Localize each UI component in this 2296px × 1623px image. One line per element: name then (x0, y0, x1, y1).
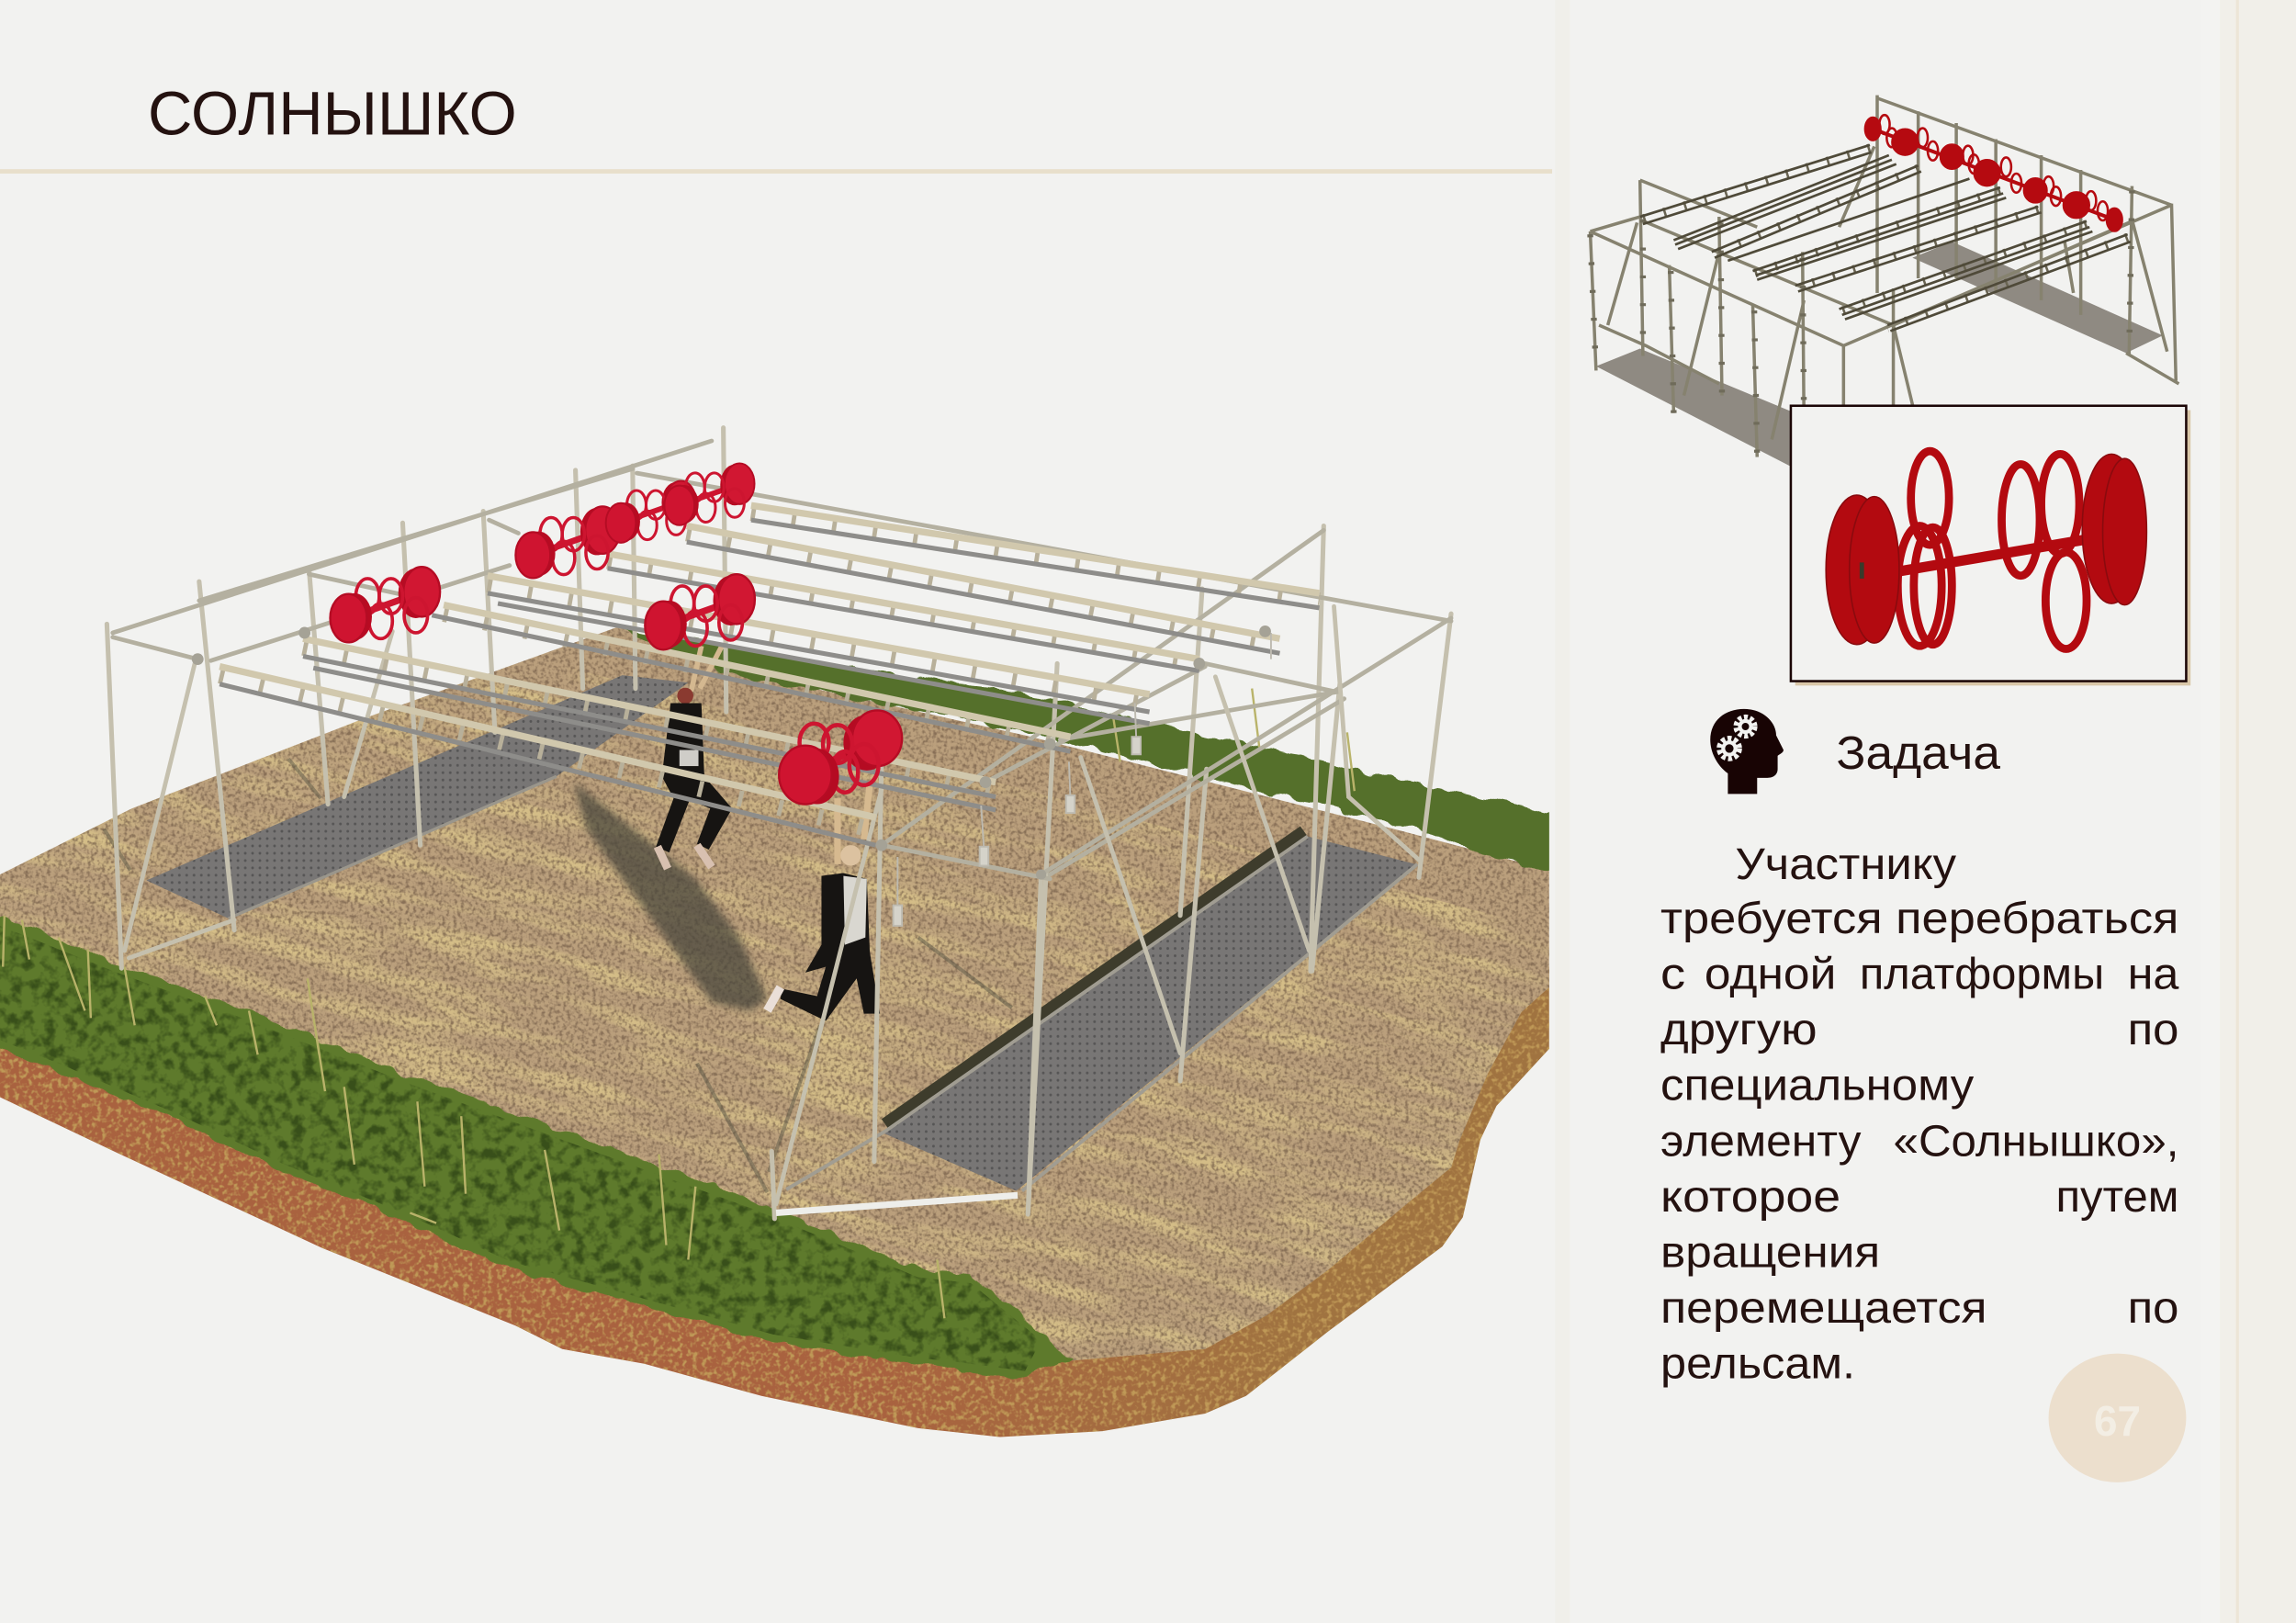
thumbnail clamps on posts (1591, 190, 2132, 457)
body text: элементу (1660, 1117, 1862, 1166)
tube clamps (192, 626, 1271, 880)
body text (1660, 840, 2179, 1389)
body text: платформы (1860, 950, 2104, 998)
body text: по (2128, 1284, 2178, 1333)
thumbnail platform right (1912, 242, 2163, 353)
grass mottling (0, 926, 1041, 1371)
side margin bands (1555, 0, 2296, 1623)
thumbnail: overall structure (1591, 96, 2178, 468)
ground: dirt surface (0, 627, 1549, 1361)
thumbnail ladders (1640, 145, 2131, 331)
reel detail drawing (1826, 451, 2146, 648)
ground: front grass strip (0, 917, 1070, 1377)
body text: с (1660, 950, 1685, 998)
body text: по (2128, 1006, 2178, 1054)
body text: рельсам. (1660, 1340, 1855, 1389)
inset box: reel detail (1791, 406, 2190, 685)
icon: head with gears (1710, 709, 1784, 794)
hanging weights (894, 633, 1271, 926)
person near (767, 783, 880, 1021)
thumbnail posts and frame (1591, 96, 2178, 457)
frame shadows on ground (104, 759, 1012, 1192)
ground: soil specks (0, 938, 1549, 1437)
body text: перемещается (1660, 1284, 1987, 1333)
body text: Участнику (1735, 840, 1956, 889)
shadow on ground (574, 783, 767, 1010)
scaffold frame tubes (107, 428, 1451, 1219)
thumbnail reels (1864, 115, 2122, 231)
page number badge (2049, 1354, 2186, 1482)
ground sill tube (776, 1195, 1018, 1212)
body text: путем (2056, 1173, 2178, 1222)
top beams (113, 441, 1451, 879)
body text: другую (1660, 1006, 1818, 1054)
platform: far left (146, 675, 688, 919)
red reels on rails (331, 463, 902, 805)
title underline (0, 169, 1552, 174)
person far (656, 646, 732, 869)
near reel (779, 710, 902, 805)
grass blades (3, 689, 1355, 1318)
page number badge: 67 (2094, 1397, 2141, 1445)
ground: back grass (618, 627, 1567, 873)
body text: одной (1705, 950, 1836, 998)
body text: специальному (1660, 1062, 1974, 1110)
posts (107, 428, 1451, 1219)
diagonals (125, 606, 1419, 1204)
body text: вращения (1660, 1228, 1880, 1277)
title: СОЛНЫШКО (148, 80, 517, 149)
body text: которое (1660, 1173, 1840, 1222)
ladder rails (219, 505, 1320, 845)
platform: near right (786, 826, 1417, 1191)
body text: «Солнышко», (1894, 1117, 2178, 1166)
thumbnail platform left (1596, 349, 1795, 468)
ground: soil side (0, 938, 1549, 1437)
main scene: obstacle on ground (0, 428, 1567, 1437)
heading: task: Задача (1836, 727, 2001, 779)
body text: требуется перебраться (1660, 895, 2178, 943)
body text: на (2128, 950, 2179, 998)
